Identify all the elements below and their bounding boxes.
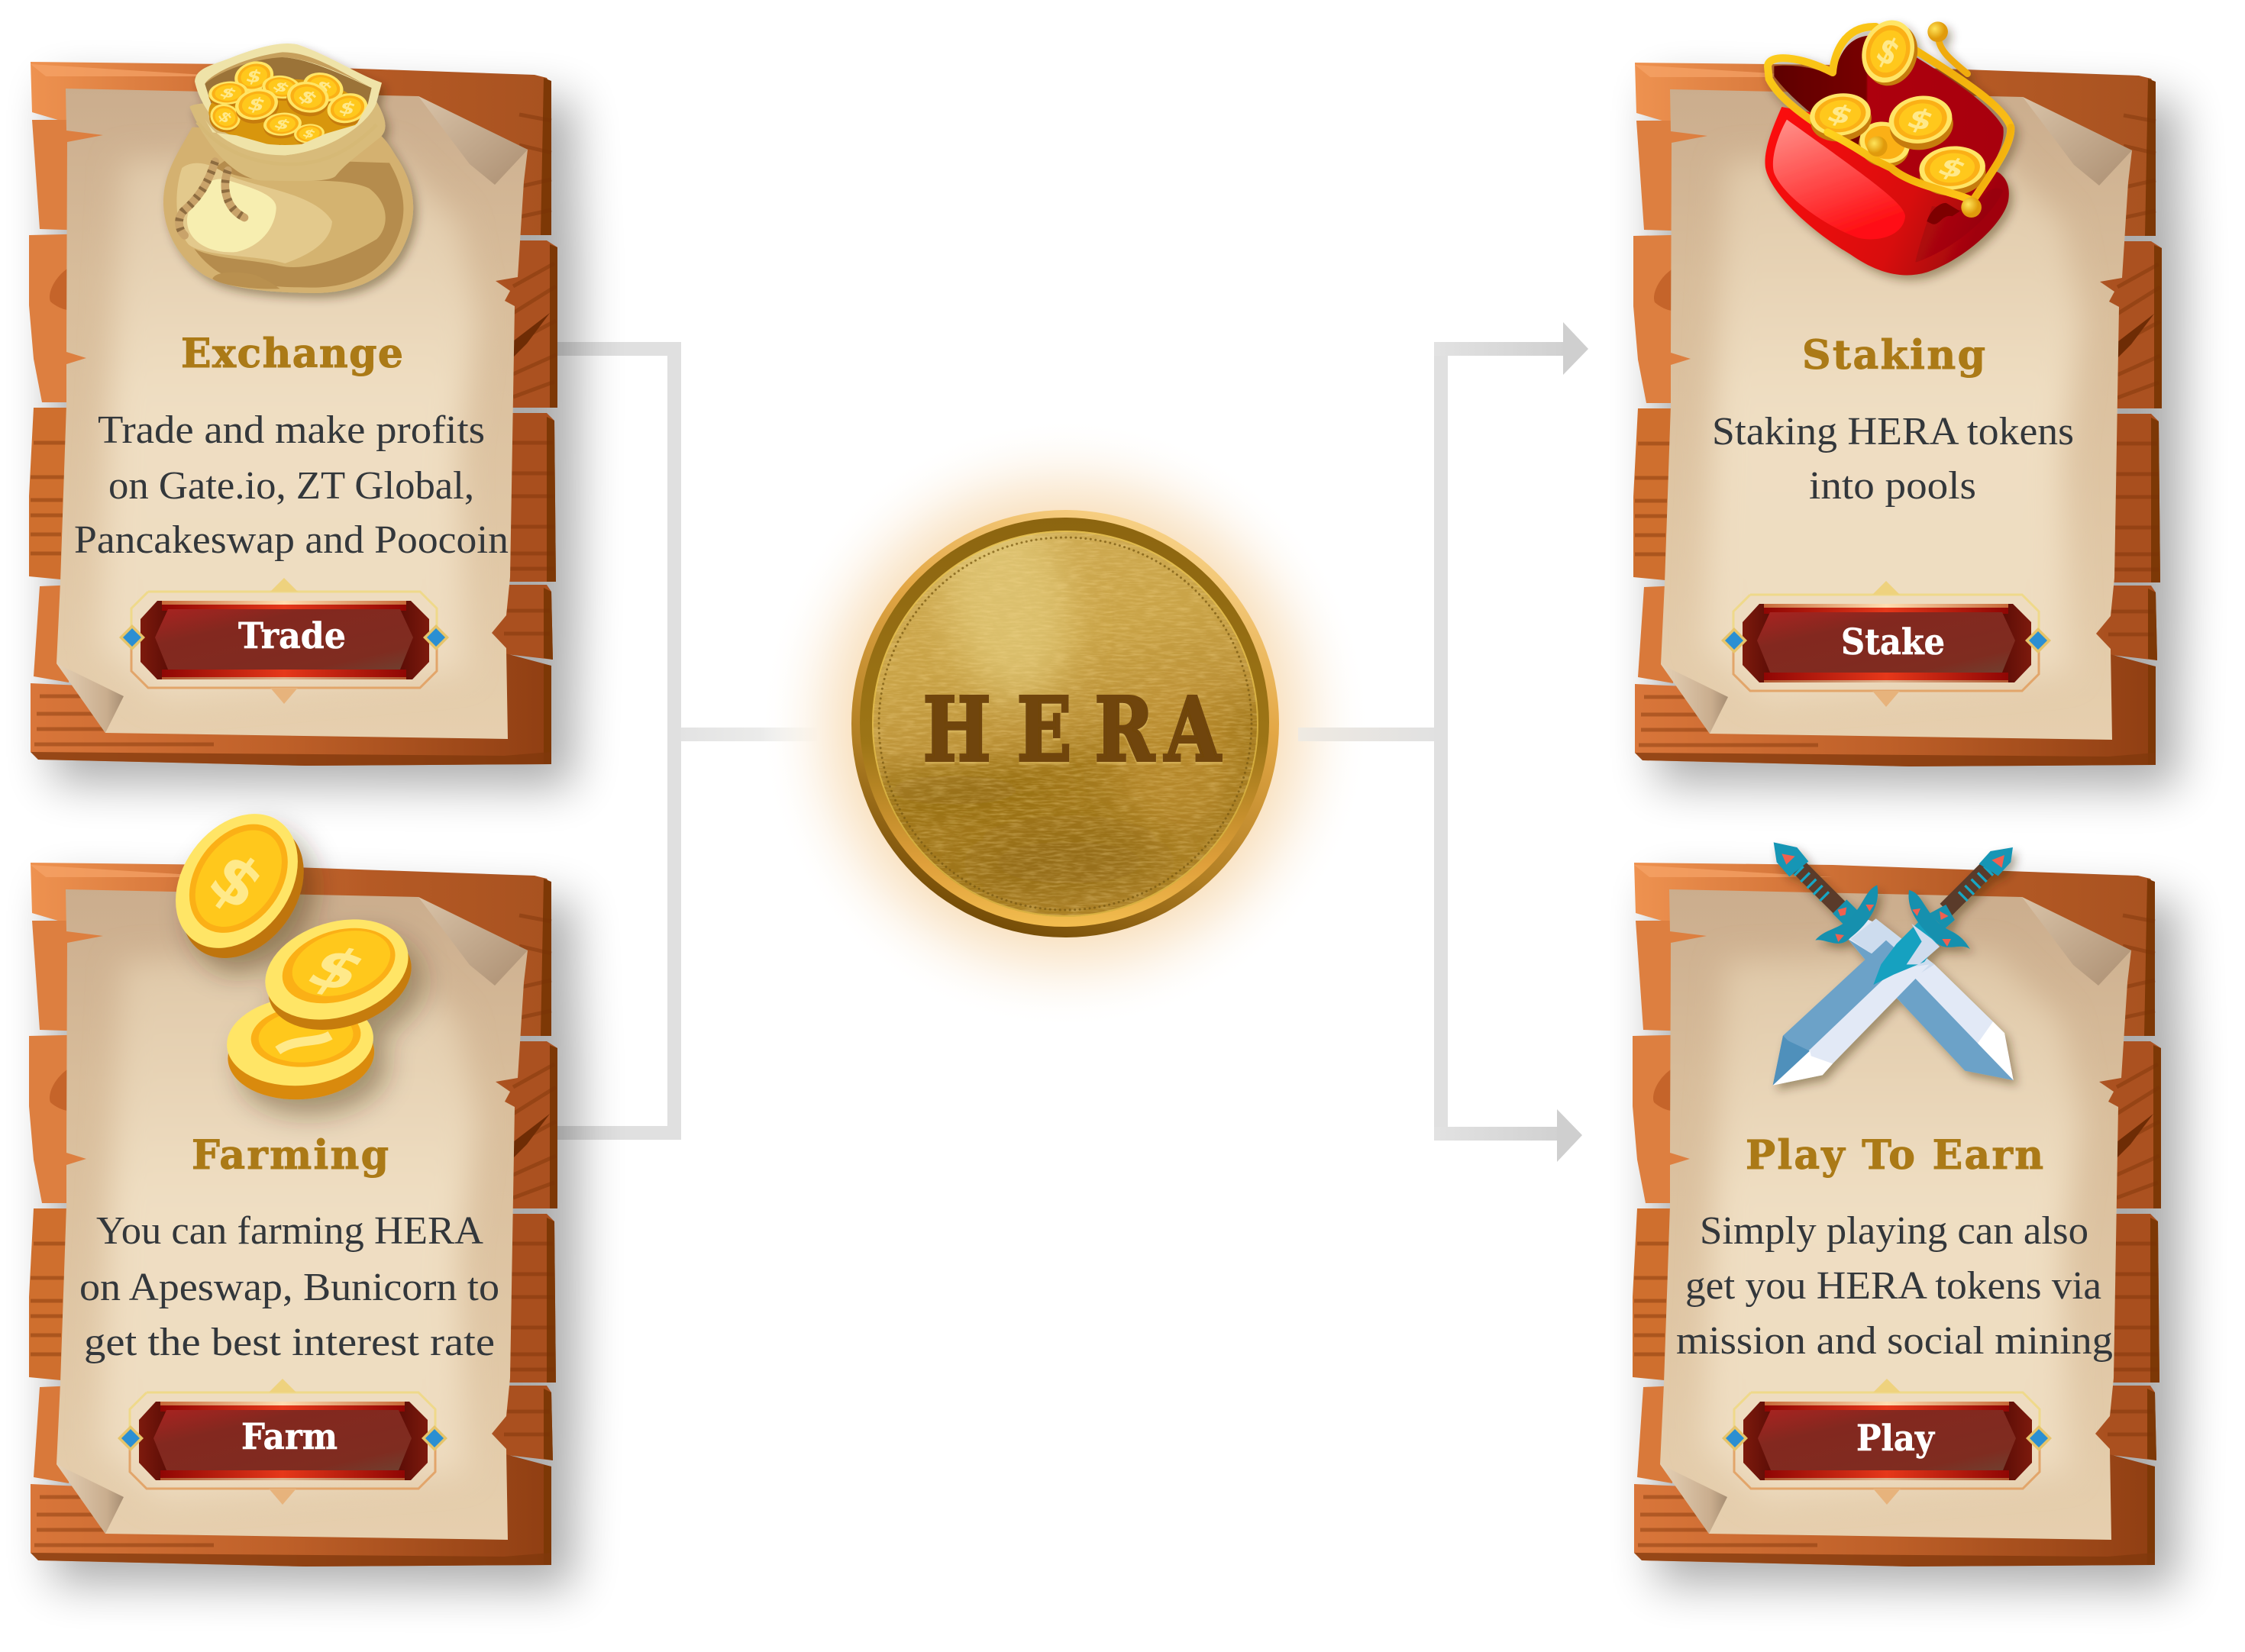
description: get the best interest rate — [84, 1321, 495, 1364]
icon: gold coins: $ — [294, 936, 380, 1003]
icon: bag of gold coins: $ — [243, 66, 265, 87]
heading: Exchange — [181, 331, 403, 377]
icon: bag of gold coins: $ — [270, 116, 294, 133]
heading: Play To Earn — [1746, 1132, 2043, 1179]
description: mission and social mining — [1676, 1319, 2113, 1363]
button: Stake — [1721, 581, 2051, 707]
description — [74, 408, 509, 562]
button: Farm — [118, 1379, 447, 1505]
parchment — [57, 889, 528, 1540]
button: Trade — [119, 578, 449, 704]
icon: bag of gold coins — [163, 44, 413, 293]
central coin: HERA — [851, 493, 1279, 937]
button: Play — [1722, 1379, 2052, 1505]
description: Simply playing can also — [1700, 1209, 2088, 1253]
icon: gold coins: $ — [195, 837, 277, 926]
button: Trade: Trade — [238, 615, 346, 657]
icon: red coin purse: $ — [1901, 102, 1940, 137]
icon: red coin purse — [1765, 13, 2011, 275]
heading: Farming — [192, 1132, 389, 1179]
icon: bag of gold coins: $ — [216, 84, 241, 102]
icon: red coin purse: $ — [1821, 99, 1859, 131]
button: Stake: Stake — [1841, 621, 1945, 663]
description: on Apeswap, Bunicorn to — [79, 1266, 499, 1309]
wood frame — [29, 62, 579, 787]
coin glow — [760, 418, 1371, 1029]
panel: Play To Earn — [1633, 842, 2182, 1588]
icon: bag of gold coins: $ — [293, 86, 322, 109]
wood frame — [1633, 863, 2182, 1588]
description: You can farming HERA — [96, 1209, 483, 1253]
parchment — [1661, 89, 2132, 740]
description: Trade and make profits — [98, 408, 485, 452]
parchment — [57, 89, 528, 739]
description — [1712, 410, 2074, 508]
icon: red coin purse: $ — [1932, 152, 1973, 184]
panel: Staking — [1633, 13, 2183, 788]
description: into pools — [1809, 464, 1976, 508]
parchment — [1660, 889, 2131, 1540]
button: Farm: Farm — [241, 1416, 338, 1458]
description: get you HERA tokens via — [1685, 1264, 2101, 1308]
wood frame — [29, 863, 579, 1588]
description: on Gate.io, ZT Global, — [108, 464, 474, 508]
icon: crossed swords — [1773, 842, 2014, 1086]
connector: left bracket from Exchange and Farming to coin — [535, 342, 817, 1140]
icon: gold coins — [147, 790, 424, 1105]
icon: bag of gold coins: $ — [299, 127, 318, 141]
description — [79, 1209, 499, 1364]
icon: bag of gold coins: $ — [308, 77, 337, 98]
panel: Farming — [29, 790, 579, 1588]
icon: bag of gold coins: $ — [215, 108, 236, 126]
description: Staking HERA tokens — [1712, 410, 2074, 453]
icon: bag of gold coins: $ — [335, 98, 359, 119]
panel: Exchange — [29, 44, 579, 787]
icon: red coin purse: $ — [1870, 27, 1906, 75]
description: Pancakeswap and Poocoin — [74, 518, 509, 562]
coin label: HERA — [923, 678, 1222, 781]
wood frame — [1633, 63, 2183, 788]
icon: bag of gold coins: $ — [268, 79, 293, 96]
description — [1676, 1209, 2113, 1363]
connector: right bracket with arrows to Staking and Play To Earn — [1298, 322, 1588, 1162]
icon: bag of gold coins: $ — [244, 94, 269, 116]
heading: Staking — [1802, 332, 1985, 379]
button: Play: Play — [1856, 1418, 1936, 1460]
